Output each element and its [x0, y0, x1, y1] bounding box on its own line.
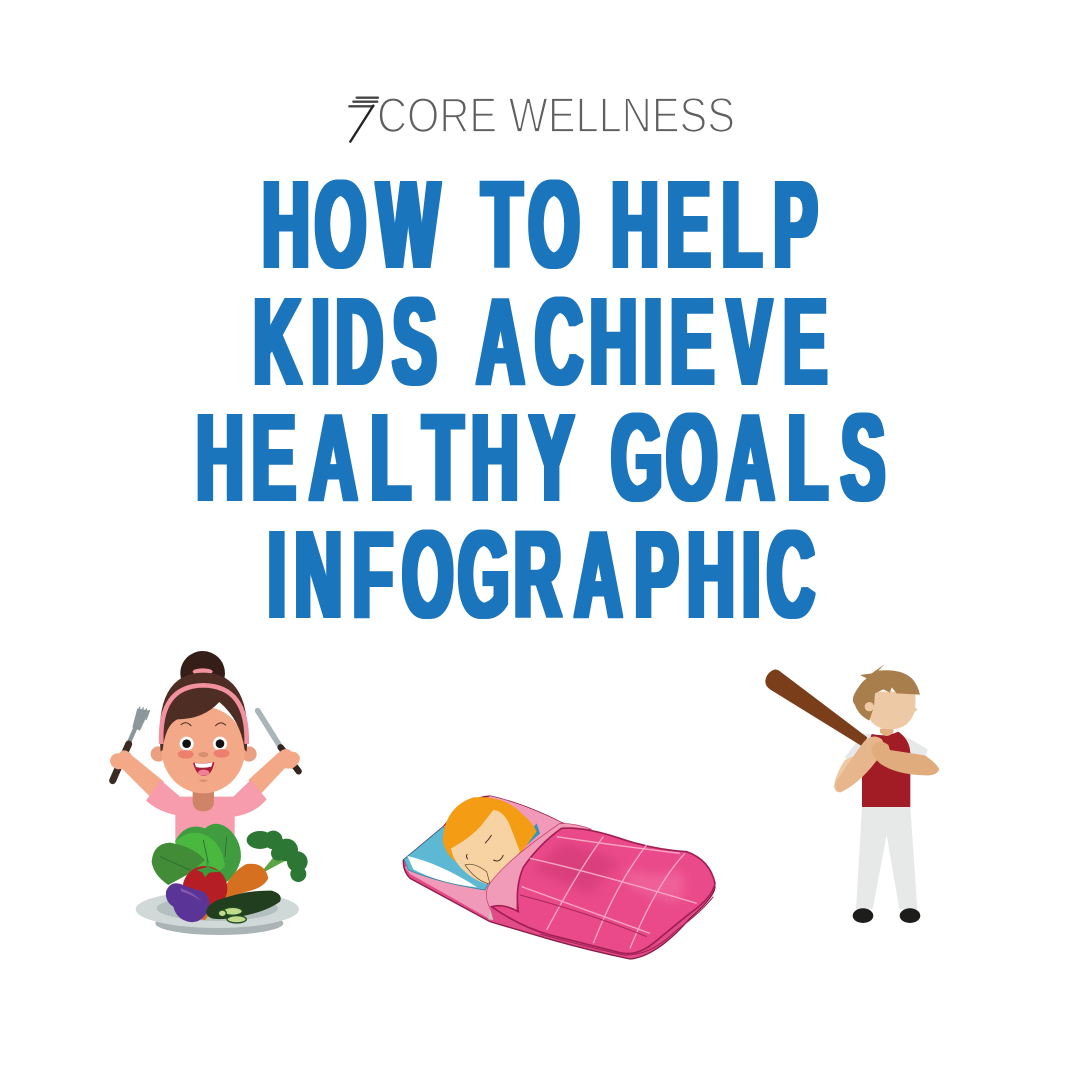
sleeping bag quilt [486, 823, 715, 955]
girl's arms and cutlery [110, 707, 300, 800]
title [196, 156, 885, 643]
illustration: boy with baseball bat [765, 664, 939, 923]
girl's head [151, 651, 257, 793]
title: HEALTHY GOALS [196, 389, 885, 526]
child's hair and face [443, 797, 537, 884]
boy's head and hair [853, 664, 920, 729]
title: INFOGRAPHIC [268, 506, 814, 643]
baseball bat [765, 669, 867, 747]
boy's legs and shoes [853, 807, 920, 923]
illustration: girl with vegetables [110, 651, 308, 935]
sleeping bag back and pillow [403, 796, 715, 959]
boy's shirt and sleeves [845, 729, 928, 807]
illustration: child asleep in pink sleeping bag [403, 796, 715, 959]
boy's arms [834, 736, 939, 792]
title: HOW TO HELP [262, 156, 817, 293]
title: KIDS ACHIEVE [253, 273, 827, 410]
girl's shirt and neck [146, 780, 267, 843]
logo: 7 Core Wellness: CORE WELLNESS [377, 89, 735, 143]
plate [136, 891, 299, 935]
vegetables [152, 824, 308, 923]
